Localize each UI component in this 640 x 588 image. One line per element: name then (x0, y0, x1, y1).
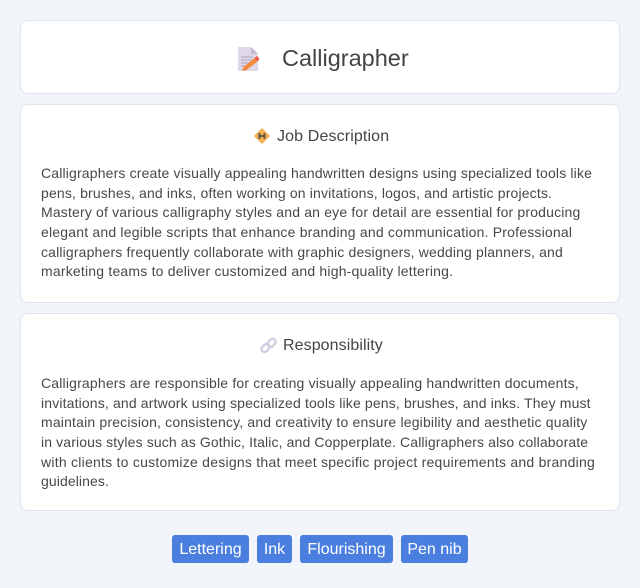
heading: responsibility: Responsibility (283, 337, 383, 354)
tag: Ink: Ink (264, 541, 285, 558)
text block: responsibility: maintain precision, consistency, and creativity to ensure legibility and aesthetic quality (41, 414, 587, 430)
heading: job description: Job Description (277, 128, 389, 145)
text block: responsibility: in various styles such as Gothic, Italic, and Copperplate. Calligraphers also collaborate (41, 434, 588, 450)
tag: Lettering: Lettering (179, 541, 242, 558)
tag: Lettering (172, 535, 249, 563)
panel: responsibility (20, 313, 620, 511)
icon: document with pencil (238, 47, 260, 71)
text block: job description: Calligraphers create visually appealing handwritten designs using specialized tools like (41, 165, 592, 181)
tag: Pen nib: Pen nib (407, 541, 462, 558)
icon: chain link (260, 338, 277, 354)
text block: responsibility: with clients to customize designs that meet specific project requirements and branding (41, 454, 595, 470)
text block: responsibility (41, 375, 595, 489)
text block: job description: elegant and legible scripts that enhance branding and communication. Professional (41, 224, 572, 240)
tag: Flourishing (300, 535, 393, 563)
text block: responsibility: Calligraphers are responsible for creating visually appealing handwritten documents, (41, 375, 579, 391)
tag: Ink (257, 535, 292, 563)
text block: job description (41, 165, 592, 279)
text block: job description: pens, brushes, and inks, often working on invitations, logos, and artistic projects. (41, 185, 552, 201)
icon: diamond (254, 128, 270, 144)
text block: job description: calligraphers frequently collaborate with graphic designers, wedding planners, and (41, 244, 563, 260)
panel: title card (20, 20, 620, 94)
text block: job description: Mastery of various calligraphy styles and an eye for detail are essential for producing (41, 204, 580, 220)
text block: job description: marketing teams to deliver customized and high-quality lettering. (41, 263, 453, 279)
text block: responsibility: invitations, and artwork using specialized tools like pens, brushes, and inks. They must (41, 395, 591, 411)
text block: responsibility: guidelines. (41, 473, 109, 489)
title: Calligrapher (282, 45, 409, 71)
panel: job description (20, 104, 620, 303)
tag: Flourishing: Flourishing (307, 541, 386, 558)
tag: Pen nib (401, 535, 468, 563)
